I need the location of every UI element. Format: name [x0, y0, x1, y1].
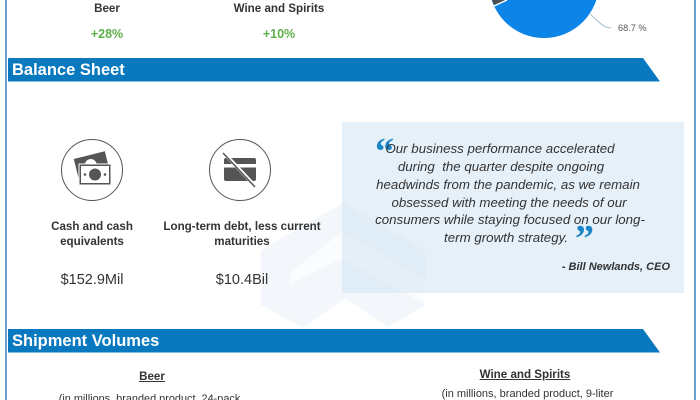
quote text: Our business performance accelerated	[385, 141, 615, 156]
quote text: obsessed with meeting the needs of our	[391, 194, 627, 210]
label: long-term debt: maturities	[214, 235, 270, 248]
section header: balance sheet	[8, 58, 660, 82]
icon: cash	[61, 139, 123, 201]
heading: beer: Beer	[139, 370, 165, 383]
pie chart	[492, 0, 611, 38]
quote panel	[342, 122, 684, 293]
left page border	[5, 0, 6, 400]
label: cash and cash equivalents	[51, 220, 133, 248]
value: debt: $10.4Bil	[216, 272, 268, 288]
right page border	[694, 0, 696, 400]
heading: wine and spirits: Wine and Spirits	[480, 368, 570, 381]
value: beer growth: +28%	[91, 27, 123, 41]
quote text	[375, 141, 645, 245]
quote text: consumers while staying focused on our long-	[375, 212, 645, 227]
quote text: term growth strategy.	[444, 230, 568, 245]
closing quote mark: ”	[575, 218, 594, 260]
section header: shipment volumes	[8, 329, 660, 352]
section header: shipment volumes: Shipment Volumes	[12, 332, 159, 350]
pie label: 68.7 %	[618, 23, 647, 33]
note: wine and spirits units: (in millions, branded product, 9-liter	[442, 388, 613, 400]
quote text: headwinds from the pandemic, as we remain	[376, 176, 640, 192]
section header: balance sheet: Balance Sheet	[12, 61, 125, 79]
value: cash: $152.9Mil	[61, 272, 123, 288]
opening quote mark: “	[375, 131, 394, 173]
label: long-term debt: Long-term debt, less current	[163, 220, 321, 232]
value: wine and spirits growth: +10%	[263, 27, 295, 41]
label: cash and cash equivalents: Cash and cash	[51, 220, 133, 232]
label: beer growth: Beer	[94, 2, 120, 15]
icon: credit card crossed out	[209, 139, 271, 201]
quote text: during the quarter despite ongoing	[398, 159, 604, 174]
label: cash and cash equivalents: equivalents	[60, 235, 124, 248]
label: wine and spirits growth: Wine and Spirits	[234, 2, 324, 15]
label: long-term debt	[163, 220, 321, 248]
quote attribution: - Bill Newlands, CEO	[562, 261, 670, 273]
